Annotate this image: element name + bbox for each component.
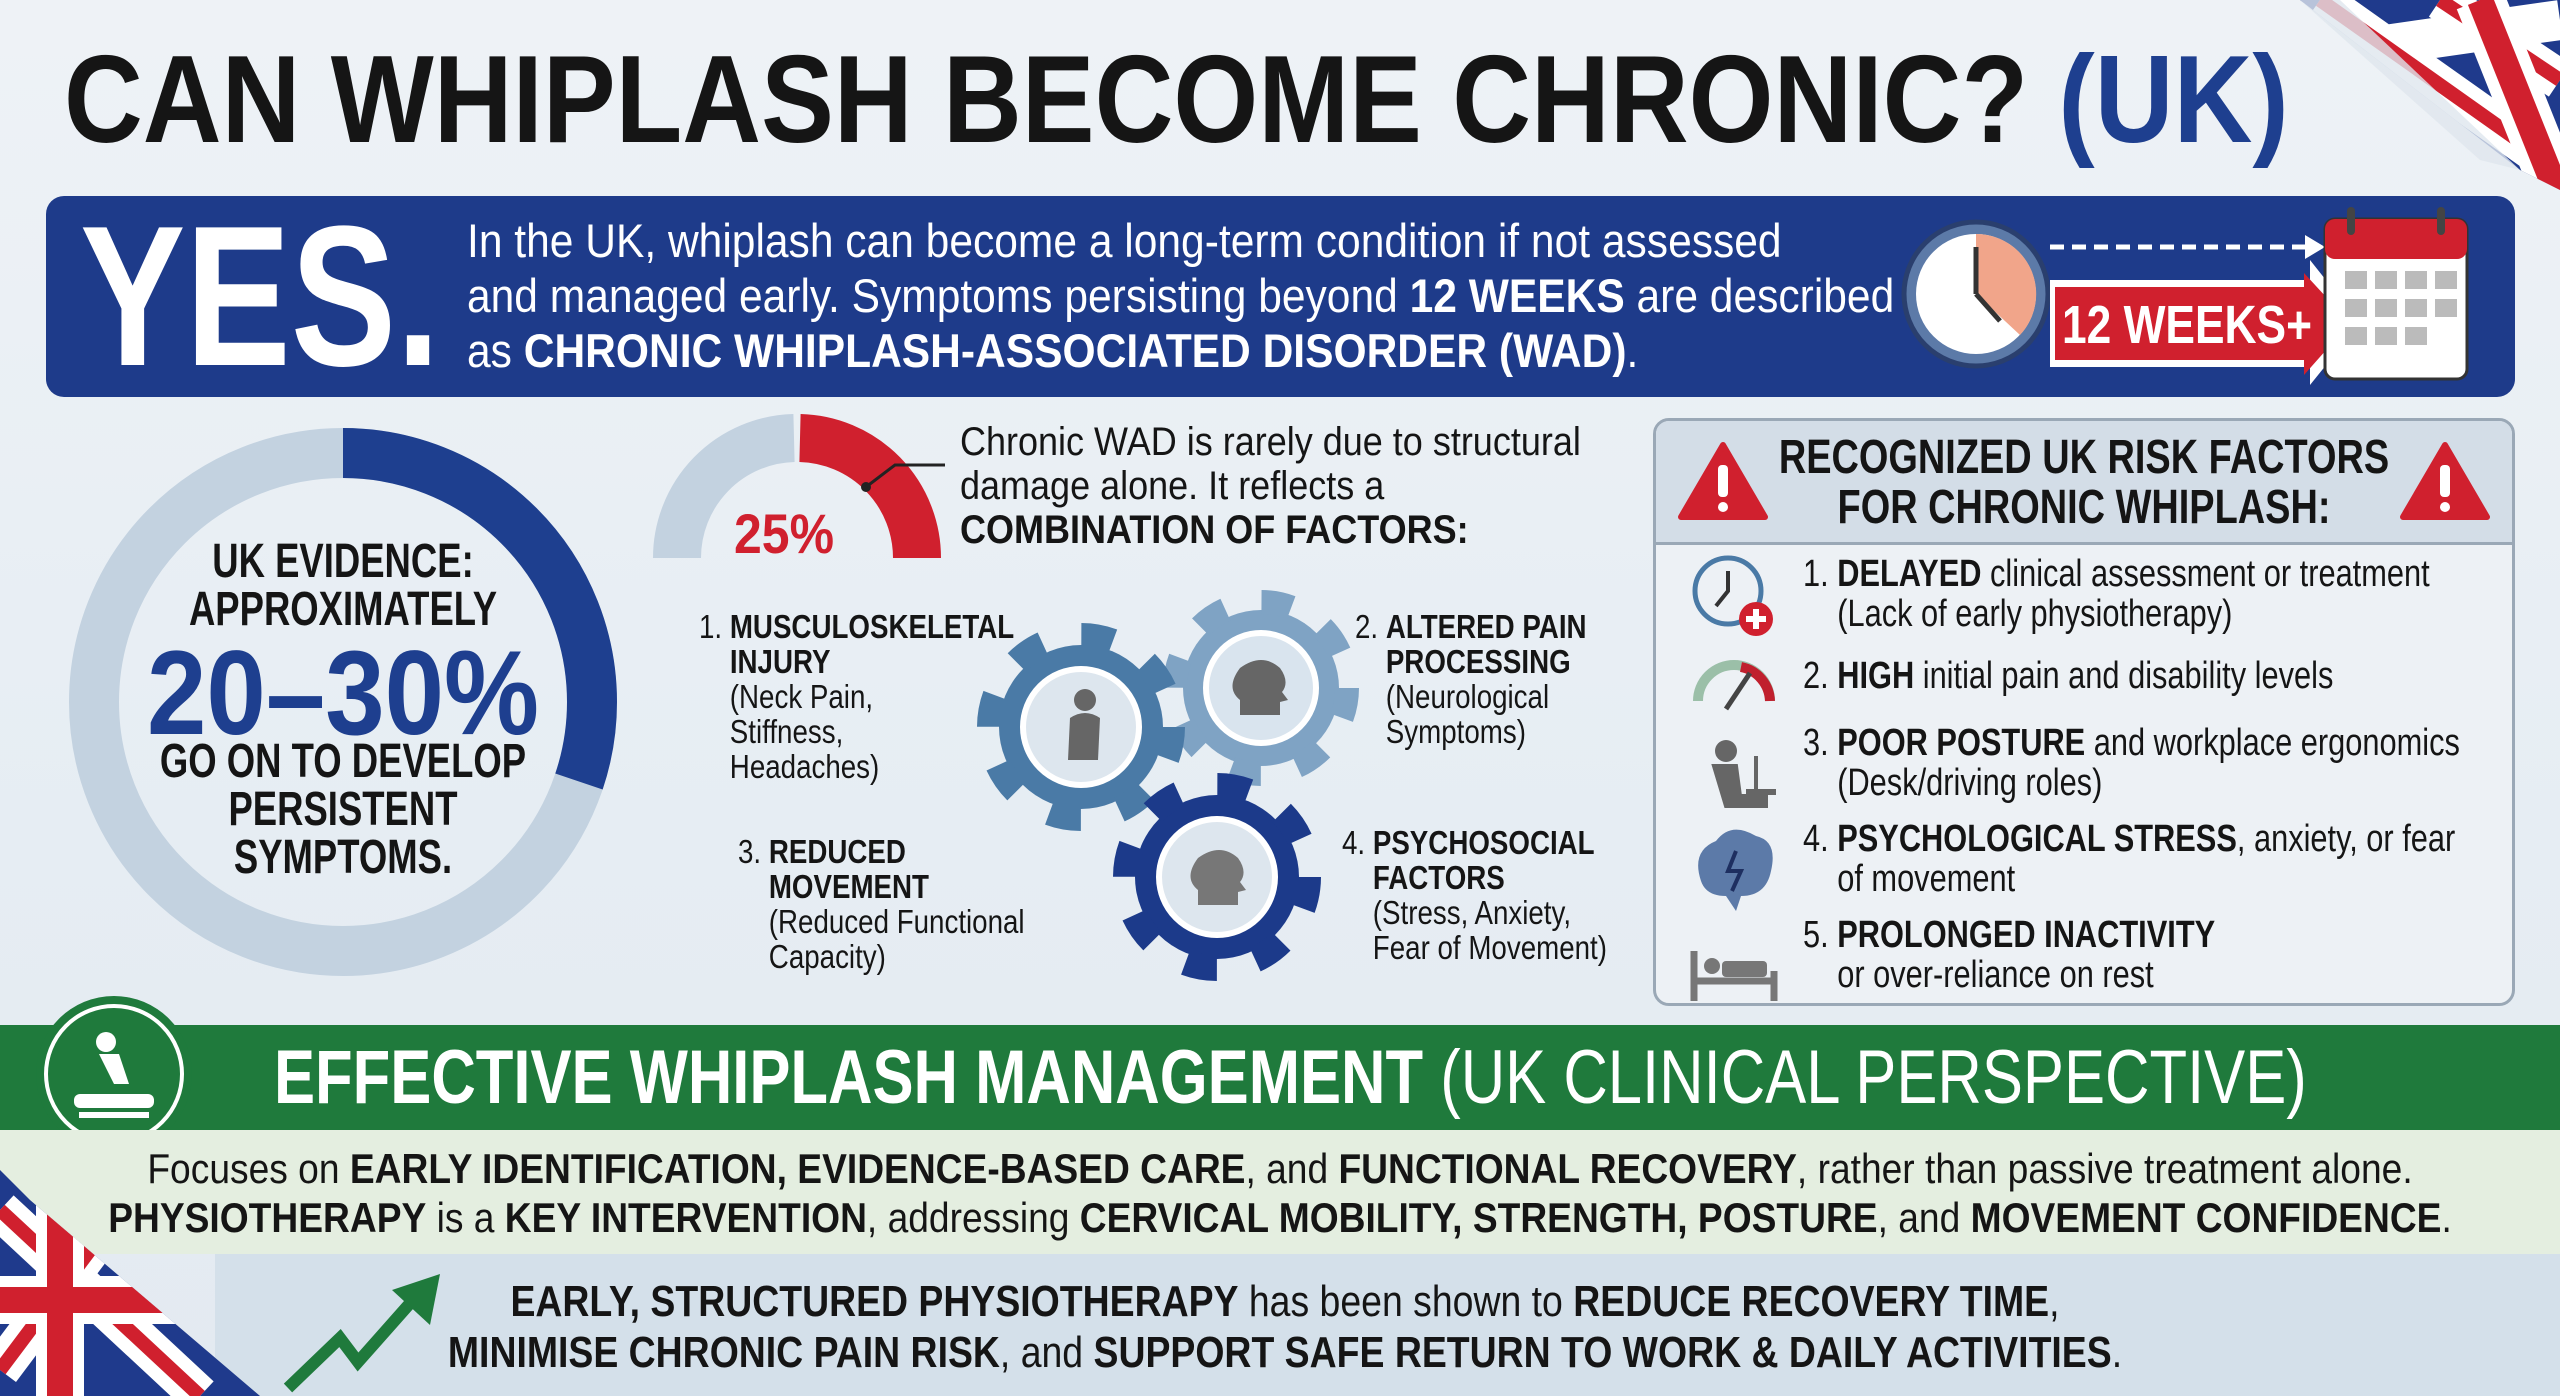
factor 2: (Neurological xyxy=(1386,678,1549,715)
text: combination of factors xyxy=(960,420,1581,552)
panel: management text: Focuses on EARLY IDENTIFICATION, EVIDENCE-BASED CARE, and FUNCTIONAL RECOVERY, rather than passive treatment alone. xyxy=(147,1145,2413,1192)
factor 4: FACTORS xyxy=(1373,859,1505,896)
factor 4: 4. PSYCHOSOCIAL xyxy=(1342,824,1595,861)
panel: management banner xyxy=(0,1025,2560,1130)
panel: outcome: EARLY, STRUCTURED PHYSIOTHERAPY has been shown to REDUCE RECOVERY TIME, xyxy=(510,1277,2060,1326)
risk list: (Lack of early physiotherapy) xyxy=(1837,593,2232,635)
risk header: RECOGNIZED UK RISK FACTORS xyxy=(1779,431,2389,484)
icon: physio circle xyxy=(44,996,184,1130)
gear 3 xyxy=(1126,786,1308,968)
factor 1: INJURY xyxy=(730,643,830,680)
risk list: 4. PSYCHOLOGICAL STRESS, anxiety, or fear xyxy=(1803,818,2455,860)
flag: top-right corner xyxy=(2300,0,2560,190)
gears diagram xyxy=(977,590,1359,981)
factor 4 xyxy=(1342,824,1607,966)
icon: clock to 12 weeks calendar xyxy=(1902,207,2468,385)
donut text: APPROXIMATELY xyxy=(189,583,497,636)
gear 2 xyxy=(1175,602,1347,774)
factor 1: (Neck Pain, xyxy=(730,678,873,715)
risk header: FOR CHRONIC WHIPLASH: xyxy=(1838,481,2330,534)
factor 1: Headaches) xyxy=(730,748,879,785)
icon: green trend arrow xyxy=(284,1274,440,1392)
panel: outcome: MINIMISE CHRONIC PAIN RISK, and SUPPORT SAFE RETURN TO WORK & DAILY ACTIVITIES. xyxy=(448,1328,2122,1377)
donut chart: 20-30%: 20–30% xyxy=(147,626,539,760)
factor 2 xyxy=(1355,608,1587,750)
factor 3: Capacity) xyxy=(769,938,886,975)
factor 4: Fear of Movement) xyxy=(1373,929,1607,966)
risk list: 5. PROLONGED INACTIVITY xyxy=(1803,914,2215,956)
risk list: 1. DELAYED clinical assessment or treatment xyxy=(1803,553,2430,595)
factor 1: 1. MUSCULOSKELETAL xyxy=(699,608,1014,645)
text: combination of factors: COMBINATION OF FACTORS: xyxy=(960,508,1469,552)
gear 1 xyxy=(990,636,1172,818)
risk list: or over-reliance on rest xyxy=(1837,954,2154,996)
factor 3 xyxy=(738,833,1025,975)
risk list: of movement xyxy=(1837,858,2015,900)
panel: YES banner xyxy=(46,196,2515,397)
intro text: In the UK, whiplash can become a long-term condition if not assessed xyxy=(467,214,1782,267)
intro text xyxy=(467,214,1894,377)
gauge: 25% xyxy=(653,414,945,565)
risk list: 3. POOR POSTURE and workplace ergonomics xyxy=(1803,722,2460,764)
risk icons xyxy=(1690,556,1778,1001)
donut chart: 20-30%: PERSISTENT xyxy=(228,783,458,836)
risk list: (Desk/driving roles) xyxy=(1837,762,2102,804)
donut chart: 20-30% xyxy=(69,428,617,976)
text: combination of factors: damage alone. It reflects a xyxy=(960,464,1384,508)
panel: management text: PHYSIOTHERAPY is a KEY INTERVENTION, addressing CERVICAL MOBILITY, STRENGTH, POSTURE, and MOVEMENT CONFIDENCE. xyxy=(108,1194,2452,1241)
icon: warning right xyxy=(2400,442,2490,520)
panel: management text xyxy=(0,1130,2560,1254)
management heading: EFFECTIVE WHIPLASH MANAGEMENT (UK CLINICAL PERSPECTIVE) xyxy=(274,1035,2307,1120)
intro text: as CHRONIC WHIPLASH-ASSOCIATED DISORDER (WAD). xyxy=(467,324,1638,377)
donut chart: 20-30%: SYMPTOMS. xyxy=(234,831,452,884)
factor 3: (Reduced Functional xyxy=(769,903,1025,940)
donut chart: 20-30%: GO ON TO DEVELOP xyxy=(160,735,526,788)
panel: risk factors xyxy=(1653,418,2515,1006)
factor 2: Symptoms) xyxy=(1386,713,1526,750)
factor 3: 3. REDUCED xyxy=(738,833,906,870)
YES heading: YES. xyxy=(80,185,440,408)
risk list: 2. HIGH initial pain and disability levels xyxy=(1803,655,2333,697)
gauge: 25%: 25% xyxy=(734,502,834,565)
title: CAN WHIPLASH BECOME CHRONIC? (UK) xyxy=(64,31,2289,169)
panel: outcome xyxy=(215,1254,2560,1396)
factor 1: Stiffness, xyxy=(730,713,843,750)
factor 2: PROCESSING xyxy=(1386,643,1571,680)
factor 1 xyxy=(699,608,1014,785)
risk header xyxy=(1656,421,2512,545)
factor 2: 2. ALTERED PAIN xyxy=(1355,608,1587,645)
icon: warning left xyxy=(1678,442,1768,520)
intro text: and managed early. Symptoms persisting beyond 12 WEEKS are described xyxy=(467,269,1894,322)
flag: bottom-left corner xyxy=(0,1170,260,1396)
factor 4: (Stress, Anxiety, xyxy=(1373,894,1571,931)
donut text xyxy=(189,535,497,636)
icon: clock to 12 weeks calendar: 12 WEEKS+ xyxy=(2062,295,2312,355)
risk list xyxy=(1803,553,2460,996)
factor 3: MOVEMENT xyxy=(769,868,929,905)
text: combination of factors: Chronic WAD is rarely due to structural xyxy=(960,420,1581,464)
donut text: UK EVIDENCE: xyxy=(212,535,474,588)
